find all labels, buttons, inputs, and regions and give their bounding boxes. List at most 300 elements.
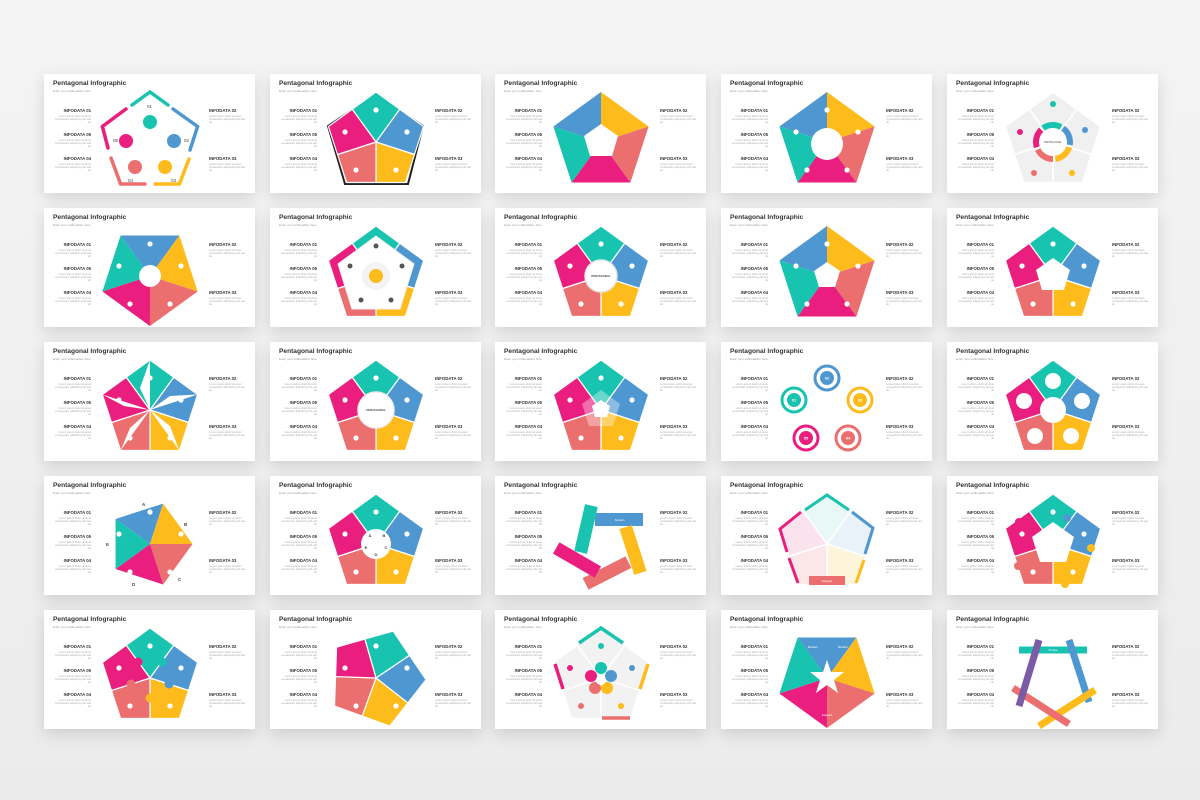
left labels: INFODATA 01 [515,510,542,515]
subtitle: Enter your subheadline here [53,223,91,227]
left labels: Lorem ipsum dolor sit amet consectetur adipiscing elit sed do [958,650,994,660]
left labels: INFODATA 01 [967,644,994,649]
diagram: pentagon with inner pentagon [1006,226,1100,316]
left labels [956,644,994,716]
title: Pentagonal Infographic [279,616,352,623]
left labels: INFODATA 05 [515,266,542,271]
left labels: Lorem ipsum dolor sit amet consectetur adipiscing elit sed do [281,296,317,306]
left labels: INFODATA 05 [741,534,768,539]
panel: slide 12 [270,342,481,461]
left labels: Lorem ipsum dolor sit amet consectetur adipiscing elit sed do [281,540,317,550]
right labels: INFODATA 02 [886,108,913,113]
diagram: outlined pentagon: 04 [128,178,134,183]
right labels: Lorem ipsum dolor sit amet consectetur adipiscing elit sed do [1112,516,1148,526]
left labels: Lorem ipsum dolor sit amet consectetur adipiscing elit sed do [281,162,317,172]
diagram: pinwheel pentagon [103,360,197,450]
left labels: INFODATA 01 [290,644,317,649]
left labels: INFODATA 04 [290,290,317,295]
left labels: Lorem ipsum dolor sit amet consectetur adipiscing elit sed do [281,382,317,392]
diagram: pentagram bars: Simple [1048,648,1058,652]
right labels [660,510,698,582]
left labels [730,510,768,582]
panel: slide 3 [495,74,706,193]
right labels: Lorem ipsum dolor sit amet consectetur adipiscing elit sed do [209,430,245,440]
diagram: swirl pentagon [779,92,874,182]
left labels: INFODATA 05 [64,534,91,539]
diagram: pentagon with star hole: Modern [838,645,848,649]
right labels: Lorem ipsum dolor sit amet consectetur adipiscing elit sed do [435,516,471,526]
subtitle: Enter your subheadline here [730,625,768,629]
left labels: Lorem ipsum dolor sit amet consectetur adipiscing elit sed do [506,516,542,526]
right labels [886,644,924,716]
diagram: lettered pentagon: B [184,522,188,527]
left labels: INFODATA 01 [290,376,317,381]
right labels: INFODATA 02 [660,242,687,247]
panel: slide 22 [270,610,481,729]
left labels: INFODATA 05 [967,266,994,271]
left labels: INFODATA 01 [515,644,542,649]
right labels: INFODATA 03 [1112,692,1139,697]
left labels: Lorem ipsum dolor sit amet consectetur adipiscing elit sed do [55,382,91,392]
diagram: pentagon with lettered center: B [383,533,386,538]
left labels: INFODATA 04 [741,558,768,563]
left labels: Lorem ipsum dolor sit amet consectetur adipiscing elit sed do [732,382,768,392]
right labels: Lorem ipsum dolor sit amet consectetur adipiscing elit sed do [660,430,696,440]
right labels: Lorem ipsum dolor sit amet consectetur adipiscing elit sed do [1112,248,1148,258]
left labels: INFODATA 04 [64,156,91,161]
right labels [435,510,473,582]
subtitle: Enter your subheadline here [53,357,91,361]
diagram: light pentagon with labels [721,482,932,601]
right labels: INFODATA 02 [435,376,462,381]
diagram: puzzle star [270,616,481,735]
left labels [732,242,768,306]
right labels: Lorem ipsum dolor sit amet consectetur adipiscing elit sed do [1112,430,1148,440]
right labels: INFODATA 02 [435,108,462,113]
diagram: pentagon with star hole: Modern [808,645,818,649]
right labels: INFODATA 03 [209,156,236,161]
right labels: Lorem ipsum dolor sit amet consectetur adipiscing elit sed do [435,650,471,660]
right labels: INFODATA 02 [209,376,236,381]
left labels: Lorem ipsum dolor sit amet consectetur adipiscing elit sed do [958,272,994,282]
right labels: Lorem ipsum dolor sit amet consectetur adipiscing elit sed do [435,430,471,440]
left labels: Lorem ipsum dolor sit amet consectetur adipiscing elit sed do [506,698,542,708]
left labels: INFODATA 04 [967,692,994,697]
left labels: INFODATA 01 [64,510,91,515]
left labels: INFODATA 05 [290,132,317,137]
right labels: Lorem ipsum dolor sit amet consectetur adipiscing elit sed do [886,248,922,258]
right labels [435,242,471,306]
title: Pentagonal Infographic [504,348,577,355]
left labels: Lorem ipsum dolor sit amet consectetur adipiscing elit sed do [281,114,317,124]
left labels: Lorem ipsum dolor sit amet consectetur adipiscing elit sed do [281,674,317,684]
subtitle: Enter your subheadline here [956,89,994,93]
left labels [53,510,91,582]
title: Pentagonal Infographic [956,482,1029,489]
title: Pentagonal Infographic [53,482,126,489]
left labels: Lorem ipsum dolor sit amet consectetur adipiscing elit sed do [732,162,768,172]
left labels: INFODATA 05 [290,534,317,539]
right labels: Lorem ipsum dolor sit amet consectetur adipiscing elit sed do [209,650,245,660]
panel: slide 18 [495,476,706,595]
title: Pentagonal Infographic [53,214,126,221]
title: Pentagonal Infographic [504,616,577,623]
right labels: Lorem ipsum dolor sit amet consectetur adipiscing elit sed do [1112,382,1148,392]
subtitle: Enter your subheadline here [504,89,542,93]
right labels: Lorem ipsum dolor sit amet consectetur adipiscing elit sed do [435,698,471,708]
left labels [55,242,91,306]
diagram: outlined pentagon: 05 [113,138,119,143]
right labels: INFODATA 02 [435,242,462,247]
subtitle: Enter your subheadline here [53,491,91,495]
left labels [281,242,317,306]
right labels: Lorem ipsum dolor sit amet consectetur adipiscing elit sed do [1112,698,1148,708]
title: Pentagonal Infographic [956,80,1029,87]
left labels: INFODATA 04 [515,424,542,429]
subtitle: Enter your subheadline here [279,357,317,361]
diagram: pentagon with center circle [329,360,423,450]
left labels: Lorem ipsum dolor sit amet consectetur adipiscing elit sed do [55,540,91,550]
diagram: five ring circles: 03 [858,398,863,402]
diagram: lettered pentagon: A [142,502,146,507]
diagram: swirl with hole [102,236,198,326]
left labels: Lorem ipsum dolor sit amet consectetur adipiscing elit sed do [958,698,994,708]
left labels: Lorem ipsum dolor sit amet consectetur adipiscing elit sed do [732,138,768,148]
right labels: INFODATA 03 [660,424,687,429]
right labels: INFODATA 03 [886,156,913,161]
right labels [886,376,924,448]
right labels: INFODATA 02 [1112,376,1139,381]
left labels: INFODATA 05 [967,400,994,405]
left labels: INFODATA 01 [967,242,994,247]
panel: slide 7 [270,208,481,327]
subtitle: Enter your subheadline here [956,357,994,361]
left labels: Lorem ipsum dolor sit amet consectetur adipiscing elit sed do [506,406,542,416]
left labels: Lorem ipsum dolor sit amet consectetur adipiscing elit sed do [281,698,317,708]
left labels: Lorem ipsum dolor sit amet consectetur adipiscing elit sed do [55,248,91,258]
right labels: Lorem ipsum dolor sit amet consectetur adipiscing elit sed do [435,114,471,124]
left labels: INFODATA 04 [741,692,768,697]
right labels: INFODATA 02 [886,242,913,247]
right labels: Lorem ipsum dolor sit amet consectetur adipiscing elit sed do [209,564,245,574]
right labels: INFODATA 03 [435,290,462,295]
title: Pentagonal Infographic [956,348,1029,355]
left labels: Lorem ipsum dolor sit amet consectetur adipiscing elit sed do [958,382,994,392]
right labels: Lorem ipsum dolor sit amet consectetur adipiscing elit sed do [209,516,245,526]
diagram: light pentagon with colored edges [495,616,706,735]
diagram: pentagon with lettered center: C [385,545,388,550]
right labels [209,242,245,306]
left labels: INFODATA 01 [967,376,994,381]
panel: slide 4 [721,74,932,193]
right labels: INFODATA 03 [886,558,913,563]
left labels: Lorem ipsum dolor sit amet consectetur adipiscing elit sed do [506,138,542,148]
left labels: INFODATA 01 [515,242,542,247]
right labels: Lorem ipsum dolor sit amet consectetur adipiscing elit sed do [1112,114,1148,124]
diagram: five ring circles: 04 [846,436,851,440]
diagram: pentagon with center circle: PENTAGONAL [366,408,386,412]
diagram: gray pentagon with ring [1006,93,1100,182]
panel: slide 1 [44,74,255,193]
right labels: Lorem ipsum dolor sit amet consectetur adipiscing elit sed do [660,248,696,258]
left labels [506,376,542,440]
left labels: Lorem ipsum dolor sit amet consectetur adipiscing elit sed do [732,674,768,684]
right labels [886,242,922,306]
left labels: Lorem ipsum dolor sit amet consectetur adipiscing elit sed do [506,430,542,440]
right labels [660,108,696,172]
diagram: star with center circle: PENTAGONAL [591,274,611,278]
left labels: Lorem ipsum dolor sit amet consectetur adipiscing elit sed do [958,248,994,258]
diagram: pentagon with lettered center: D [375,552,378,557]
right labels [209,510,247,582]
left labels: Lorem ipsum dolor sit amet consectetur adipiscing elit sed do [958,674,994,684]
diagram: outlined pentagon: 02 [184,138,190,143]
diagram: pentagon with circles [947,348,1158,467]
right labels: INFODATA 03 [660,558,687,563]
left labels: INFODATA 04 [967,558,994,563]
diagram: ribbon pentagon [553,92,648,182]
left labels: INFODATA 01 [290,510,317,515]
left labels: Lorem ipsum dolor sit amet consectetur adipiscing elit sed do [281,430,317,440]
left labels [506,108,542,172]
right labels: INFODATA 02 [209,108,236,113]
right labels [1112,242,1148,306]
right labels: Lorem ipsum dolor sit amet consectetur adipiscing elit sed do [1112,564,1148,574]
left labels: INFODATA 01 [64,376,91,381]
title: Pentagonal Infographic [279,214,352,221]
left labels [504,510,542,582]
right labels: INFODATA 02 [886,644,913,649]
right labels: Lorem ipsum dolor sit amet consectetur adipiscing elit sed do [660,296,696,306]
left labels: INFODATA 01 [64,242,91,247]
right labels: Lorem ipsum dolor sit amet consectetur adipiscing elit sed do [1112,650,1148,660]
right labels [435,108,471,172]
left labels: INFODATA 01 [515,108,542,113]
right labels: Lorem ipsum dolor sit amet consectetur adipiscing elit sed do [435,296,471,306]
right labels: INFODATA 02 [435,644,462,649]
left labels: INFODATA 04 [64,290,91,295]
panel: slide 17 [270,476,481,595]
left labels: INFODATA 05 [515,668,542,673]
left labels: Lorem ipsum dolor sit amet consectetur adipiscing elit sed do [732,114,768,124]
right labels: INFODATA 03 [886,424,913,429]
diagram: pentagram bars [947,616,1158,735]
panel: slide 5 [947,74,1158,193]
right labels: INFODATA 03 [435,558,462,563]
right labels [886,108,922,172]
subtitle: Enter your subheadline here [53,89,91,93]
left labels [958,242,994,306]
subtitle: Enter your subheadline here [504,491,542,495]
left labels: INFODATA 05 [64,132,91,137]
left labels: INFODATA 05 [290,400,317,405]
left labels: INFODATA 05 [64,400,91,405]
right labels: Lorem ipsum dolor sit amet consectetur adipiscing elit sed do [209,248,245,258]
left labels [506,242,542,306]
right labels [1112,644,1150,716]
right labels: INFODATA 03 [1112,156,1139,161]
right labels: Lorem ipsum dolor sit amet consectetur adipiscing elit sed do [660,516,696,526]
right labels: INFODATA 02 [209,510,236,515]
left labels: INFODATA 04 [741,424,768,429]
right labels [660,644,698,716]
left labels: Lorem ipsum dolor sit amet consectetur adipiscing elit sed do [506,162,542,172]
left labels: INFODATA 04 [64,692,91,697]
subtitle: Enter your subheadline here [730,357,768,361]
right labels: INFODATA 03 [1112,290,1139,295]
diagram: pentagon with star hole: Elegant [822,713,832,717]
right labels: Lorem ipsum dolor sit amet consectetur adipiscing elit sed do [435,162,471,172]
right labels: Lorem ipsum dolor sit amet consectetur adipiscing elit sed do [886,698,922,708]
right labels: Lorem ipsum dolor sit amet consectetur adipiscing elit sed do [660,698,696,708]
left labels: INFODATA 01 [741,644,768,649]
left labels: Lorem ipsum dolor sit amet consectetur adipiscing elit sed do [732,430,768,440]
left labels: Lorem ipsum dolor sit amet consectetur adipiscing elit sed do [732,698,768,708]
left labels: Lorem ipsum dolor sit amet consectetur adipiscing elit sed do [732,564,768,574]
left labels: Lorem ipsum dolor sit amet consectetur adipiscing elit sed do [506,564,542,574]
right labels: Lorem ipsum dolor sit amet consectetur adipiscing elit sed do [209,162,245,172]
left labels: Lorem ipsum dolor sit amet consectetur adipiscing elit sed do [958,406,994,416]
right labels: INFODATA 03 [209,692,236,697]
left labels: Lorem ipsum dolor sit amet consectetur adipiscing elit sed do [281,516,317,526]
diagram: rotated rectangles: Modern [615,518,625,522]
panel: slide 19 [721,476,932,595]
right labels: Lorem ipsum dolor sit amet consectetur adipiscing elit sed do [886,382,922,392]
panel: slide 10 [947,208,1158,327]
diagram: five ring circles: 02 [825,376,830,380]
left labels: Lorem ipsum dolor sit amet consectetur adipiscing elit sed do [55,650,91,660]
subtitle: Enter your subheadline here [956,223,994,227]
right labels [886,510,924,582]
panel: slide 6 [44,208,255,327]
left labels: Lorem ipsum dolor sit amet consectetur adipiscing elit sed do [281,248,317,258]
right labels: Lorem ipsum dolor sit amet consectetur adipiscing elit sed do [1112,162,1148,172]
title: Pentagonal Infographic [53,348,126,355]
left labels [279,510,317,582]
right labels: INFODATA 02 [209,644,236,649]
diagram: star pentagon [326,92,424,185]
right labels: Lorem ipsum dolor sit amet consectetur adipiscing elit sed do [886,114,922,124]
right labels: INFODATA 03 [435,692,462,697]
subtitle: Enter your subheadline here [279,491,317,495]
left labels: INFODATA 01 [741,510,768,515]
left labels: Lorem ipsum dolor sit amet consectetur adipiscing elit sed do [281,650,317,660]
right labels: Lorem ipsum dolor sit amet consectetur adipiscing elit sed do [886,296,922,306]
right labels [435,376,471,440]
right labels: Lorem ipsum dolor sit amet consectetur adipiscing elit sed do [886,564,922,574]
right labels: INFODATA 03 [660,692,687,697]
right labels: Lorem ipsum dolor sit amet consectetur adipiscing elit sed do [209,296,245,306]
subtitle: Enter your subheadline here [504,357,542,361]
left labels: INFODATA 05 [64,668,91,673]
subtitle: Enter your subheadline here [279,89,317,93]
right labels: Lorem ipsum dolor sit amet consectetur adipiscing elit sed do [660,382,696,392]
subtitle: Enter your subheadline here [730,491,768,495]
left labels: INFODATA 04 [967,290,994,295]
panel: slide 11 [44,342,255,461]
panel: slide 23 [495,610,706,729]
subtitle: Enter your subheadline here [279,223,317,227]
right labels: INFODATA 02 [1112,510,1139,515]
left labels [281,376,317,440]
left labels: Lorem ipsum dolor sit amet consectetur adipiscing elit sed do [958,430,994,440]
left labels: INFODATA 05 [741,132,768,137]
left labels: Lorem ipsum dolor sit amet consectetur adipiscing elit sed do [55,698,91,708]
left labels [730,644,768,716]
right labels: Lorem ipsum dolor sit amet consectetur adipiscing elit sed do [209,114,245,124]
left labels: INFODATA 05 [741,266,768,271]
panel: slide 15 [947,342,1158,461]
left labels [958,108,994,172]
right labels: INFODATA 03 [660,156,687,161]
left labels: INFODATA 04 [741,290,768,295]
left labels: INFODATA 04 [515,692,542,697]
title: Pentagonal Infographic [730,616,803,623]
right labels: INFODATA 02 [660,108,687,113]
title: Pentagonal Infographic [279,80,352,87]
left labels [55,108,91,172]
left labels [732,108,768,172]
left labels: INFODATA 01 [64,108,91,113]
left labels: INFODATA 05 [515,132,542,137]
subtitle: Enter your subheadline here [730,89,768,93]
right labels [1112,510,1150,582]
diagram: rotated rectangles [495,482,706,601]
left labels: Lorem ipsum dolor sit amet consectetur adipiscing elit sed do [732,296,768,306]
left labels: INFODATA 04 [515,558,542,563]
panel: slide 2 [270,74,481,193]
title: Pentagonal Infographic [279,348,352,355]
left labels: Lorem ipsum dolor sit amet consectetur adipiscing elit sed do [958,516,994,526]
right labels [660,376,696,440]
right labels [209,108,245,172]
left labels: INFODATA 05 [515,534,542,539]
left labels: Lorem ipsum dolor sit amet consectetur adipiscing elit sed do [732,540,768,550]
left labels: INFODATA 04 [64,424,91,429]
right labels: INFODATA 03 [209,558,236,563]
left labels: Lorem ipsum dolor sit amet consectetur adipiscing elit sed do [506,540,542,550]
right labels: INFODATA 02 [435,510,462,515]
subtitle: Enter your subheadline here [956,491,994,495]
title: Pentagonal Infographic [53,80,126,87]
right labels: INFODATA 03 [886,692,913,697]
left labels: Lorem ipsum dolor sit amet consectetur adipiscing elit sed do [958,114,994,124]
diagram: pentagon with lettered center [270,482,481,601]
diagram: lettered pentagon [44,482,255,601]
subtitle: Enter your subheadline here [504,625,542,629]
left labels: Lorem ipsum dolor sit amet consectetur adipiscing elit sed do [958,138,994,148]
left labels [504,644,542,716]
left labels: INFODATA 01 [741,376,768,381]
left labels: INFODATA 04 [290,692,317,697]
title: Pentagonal Infographic [279,482,352,489]
left labels: Lorem ipsum dolor sit amet consectetur adipiscing elit sed do [281,272,317,282]
right labels: Lorem ipsum dolor sit amet consectetur adipiscing elit sed do [660,564,696,574]
left labels: Lorem ipsum dolor sit amet consectetur adipiscing elit sed do [732,516,768,526]
left labels: Lorem ipsum dolor sit amet consectetur adipiscing elit sed do [958,162,994,172]
diagram: lettered pentagon: D [132,582,136,587]
title: Pentagonal Infographic [504,80,577,87]
right labels: INFODATA 02 [660,376,687,381]
right labels: Lorem ipsum dolor sit amet consectetur adipiscing elit sed do [660,650,696,660]
left labels [281,108,317,172]
left labels: INFODATA 04 [290,424,317,429]
left labels: Lorem ipsum dolor sit amet consectetur adipiscing elit sed do [55,430,91,440]
left labels: Lorem ipsum dolor sit amet consectetur adipiscing elit sed do [506,114,542,124]
right labels: Lorem ipsum dolor sit amet consectetur adipiscing elit sed do [660,114,696,124]
right labels [1112,108,1148,172]
title: Pentagonal Infographic [504,214,577,221]
